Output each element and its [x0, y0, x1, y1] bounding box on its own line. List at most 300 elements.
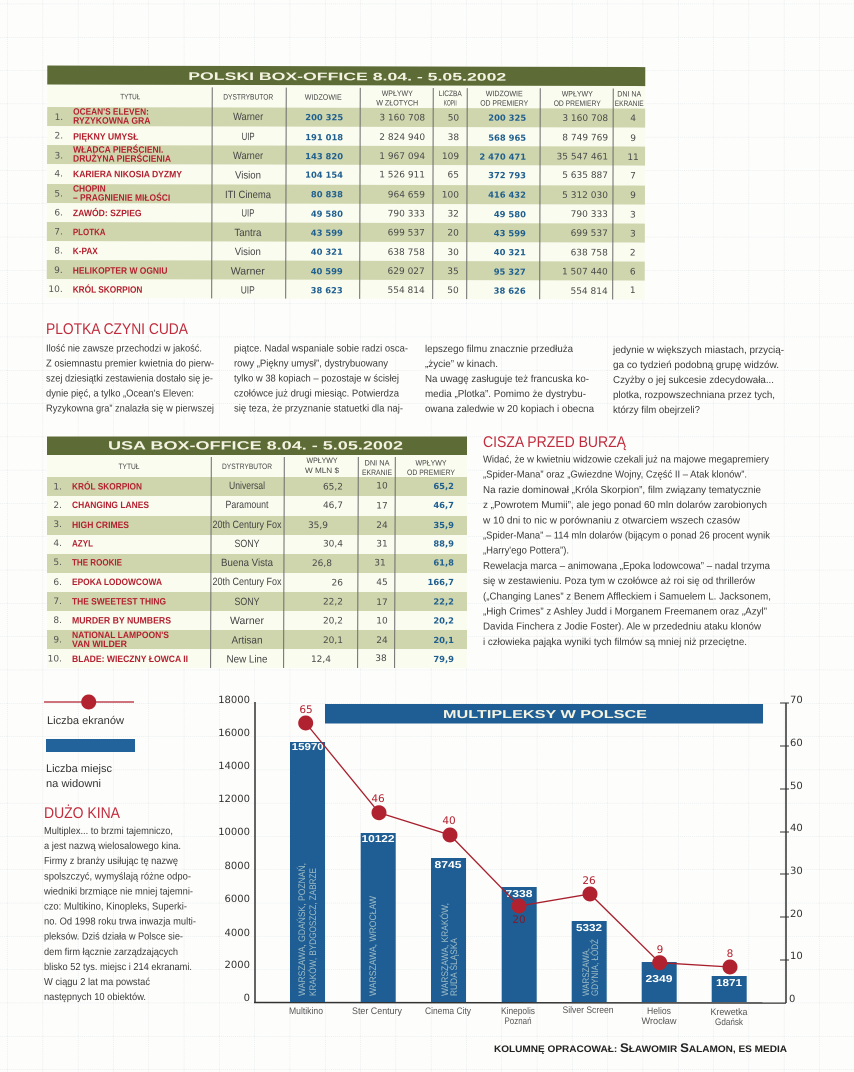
- row 3: Władca Pierścieni: 1 967 094: [379, 152, 425, 162]
- line series: number of screens: 26: [582, 875, 596, 887]
- row 6: Epoka lodowcowa: 6.: [53, 578, 62, 588]
- row 6: Epoka lodowcowa: 26: [332, 578, 343, 588]
- row 1: Ocean's Eleven: 3 160 708: [379, 113, 425, 123]
- row 6: Zawód: szpieg: 49 580: [311, 209, 343, 219]
- body paragraph lines: w 10 dni to nic w porównaniu z otwarciem wszech czasów: [482, 515, 741, 526]
- row 7: The Sweetest Thing: 22,2: [323, 598, 343, 608]
- row 3: High Crimes: 24: [376, 521, 388, 531]
- bar: Kinepolis Poznań 7338: 7338: [506, 889, 533, 900]
- row 6: Zawód: szpieg: 3: [630, 211, 636, 221]
- bar: Multikino 15970: WARSZAWA, GDAŃSK, POZNAŃ,: [296, 863, 308, 996]
- row 8: K-Pax: 40 321: [494, 247, 526, 257]
- row 8: K-Pax: 2: [630, 249, 636, 259]
- column headers: WPŁYWY: [562, 89, 593, 98]
- chart title band: [325, 704, 763, 724]
- column headers: TYTUŁ: [118, 462, 140, 471]
- row 1: Ocean's Eleven: 200 325: [488, 113, 526, 123]
- row 9: Helikopter w ogniu: 1 507 440: [562, 267, 608, 277]
- bar: Krewetka Gdańsk 1871: [712, 976, 747, 1002]
- column headers: WPŁYWY: [416, 458, 447, 468]
- column 3: owana zaledwie w 20 kopiach i obecna: [425, 404, 594, 415]
- row 7: Plotka: 43 599: [494, 228, 526, 238]
- row 10: Król Skorpion: 1: [630, 286, 636, 296]
- row 7: Plotka: Tantra: [234, 227, 262, 239]
- line series: number of screens: 40: [442, 815, 456, 827]
- row 3: High Crimes: HIGH CRIMES: [72, 520, 129, 530]
- column headers: DYSTRYBUTOR: [222, 462, 272, 471]
- row 8: Murder by Numbers: 20,2: [323, 616, 343, 626]
- row 3: Władca Pierścieni: DRUŻYNA PIERŚCIENIA: [73, 153, 171, 164]
- column 4: ga co tydzień podobną grupę widzów.: [613, 360, 779, 371]
- bar: Multikino 15970: [290, 742, 325, 1002]
- category labels: Wrocław: [642, 1016, 677, 1027]
- legend: screens line marker: Liczba ekranów: [47, 715, 124, 727]
- left axis: seats: 6000: [225, 894, 250, 905]
- row 6: Epoka lodowcowa: 20th Century Fox: [212, 576, 282, 588]
- column 2: piątce. Nadal wspaniale sobie radzi osca-: [234, 344, 408, 354]
- row 9: National Lampoon's Van Wilder: 9.: [53, 636, 62, 646]
- legend: seats bar swatch: na widowni: [46, 778, 101, 790]
- row 6: Zawód: szpieg: 49 580: [494, 209, 526, 219]
- row 10: Blade: Wieczny łowca II: 10.: [48, 654, 62, 664]
- row 10: Blade: Wieczny łowca II: 12,4: [311, 655, 331, 665]
- column headers: LICZBA: [439, 89, 462, 98]
- row 6: Zawód: szpieg: UIP: [241, 208, 254, 220]
- chart title band: MULTIPLEKSY W POLSCE: [443, 709, 647, 721]
- table title band: [47, 66, 645, 86]
- column headers: DYSTRYBUTOR: [223, 92, 274, 102]
- row 8: Murder by Numbers: [53, 615, 454, 627]
- row 2: Piękny umysł: PIĘKNY UMYSŁ: [73, 132, 139, 142]
- row 8: Murder by Numbers: Warner: [230, 615, 264, 627]
- body paragraph lines: z „Powrotem Mumii”, ale jego ponad 60 mln dolarów zarobionych: [483, 500, 767, 511]
- row 2: Piękny umysł: 9: [630, 134, 636, 144]
- row 10: Król Skorpion: 38 626: [494, 286, 526, 296]
- row 5: Chopin: 100: [442, 191, 459, 201]
- column 3: media „Plotka”. Pomimo że dystrybu-: [425, 389, 586, 400]
- column headers: OD PREMIERY: [554, 99, 601, 108]
- row 5: The Rookie: Buena Vista: [221, 557, 273, 569]
- row 6: Zawód: szpieg: [54, 207, 636, 221]
- right axis: screens: 30: [790, 866, 803, 877]
- column headers: EKRANIE: [362, 468, 392, 477]
- row 3: Władca Pierścieni: [47, 144, 645, 166]
- column headers: WIDZOWIE: [305, 93, 342, 102]
- row 5: Chopin: ITI Cinema: [225, 189, 271, 201]
- row 9: National Lampoon's Van Wilder: 20,1: [323, 636, 343, 646]
- body paragraph lines: [482, 454, 771, 648]
- row 4: Kariera Nikosia Dyzmy: [54, 169, 636, 183]
- bar: Kinepolis Poznań 7338: [502, 887, 537, 1002]
- row 8: K-Pax: K-PAX: [73, 246, 99, 256]
- row 2: Piękny umysł: 38: [448, 133, 459, 143]
- column 1: Z osiemnastu premier kwietnia do pierw-: [46, 358, 214, 370]
- row 2: Changing Lanes: 17: [376, 502, 388, 512]
- row 7: Plotka: 699 537: [388, 228, 425, 238]
- body paragraph lines: się w zestawieniu. Poza tym w czołówce aż roi się od thrillerów: [483, 576, 756, 587]
- row 4: Kariera Nikosia Dyzmy: 65: [448, 171, 459, 181]
- bar: Cinema City 8745: RUDA ŚLĄSKA: [448, 937, 460, 996]
- bar: Silver Screen 5332: GDYNIA, ŁÓDŹ: [589, 939, 601, 996]
- column 1: szej dziesiątki zestawienia dostało się je-: [46, 374, 213, 384]
- row 5: The Rookie: 31: [374, 558, 386, 568]
- body paragraph lines: dem firm łącznie zarządzających: [44, 947, 178, 958]
- column 4: plotka, rozpowszechniana przez tych,: [613, 390, 775, 401]
- row 1: Ocean's Eleven: [47, 107, 645, 128]
- row 9: Helikopter w ogniu: 35: [447, 267, 459, 277]
- right axis: screens: 0: [789, 994, 795, 1005]
- bar: Multikino 15970: 15970: [292, 742, 324, 753]
- row 7: The Sweetest Thing: [47, 592, 467, 611]
- row 8: K-Pax: 638 758: [388, 248, 425, 258]
- row 7: The Sweetest Thing: THE SWEETEST THING: [72, 596, 166, 606]
- row 3: High Crimes: [47, 516, 467, 535]
- row 10: Król Skorpion: [48, 284, 636, 298]
- row 10: Król Skorpion: 38 623: [311, 285, 343, 295]
- column headers: KOPII: [444, 99, 457, 108]
- row 4: Kariera Nikosia Dyzmy: 1 526 911: [379, 170, 425, 180]
- bar: Helios Wrocław 2349: 2349: [646, 974, 673, 985]
- row 6: Zawód: szpieg: 790 333: [388, 209, 425, 219]
- body paragraph lines: Firmy z branży usiłując tę nazwę: [44, 856, 178, 867]
- left axis: seats: 2000: [225, 960, 250, 971]
- body paragraph lines: „High Crimes” z Ashley Judd i Morganem Freemanem oraz „Azyl”: [483, 606, 767, 618]
- panel: Polish box-office table: [47, 66, 645, 300]
- row 2: Piękny umysł: [55, 131, 636, 144]
- bar: Cinema City 8745: [431, 858, 466, 1002]
- left axis: seats: 16000: [218, 728, 250, 739]
- row 8: K-Pax: 8.: [54, 247, 63, 257]
- row 2: Changing Lanes: [53, 499, 454, 512]
- row 7: Plotka: 699 537: [571, 229, 608, 239]
- row 10: Blade: Wieczny łowca II: BLADE: WIECZNY ŁOWCA II: [72, 654, 188, 664]
- row 1: Król Skorpion: [47, 477, 467, 496]
- row 4: Azyl: AZYL: [72, 538, 93, 548]
- row 4: Azyl: 31: [376, 540, 388, 550]
- bar: Cinema City 8745: 8745: [434, 860, 462, 871]
- column 1: Ilość nie zawsze przechodzi w jakość.: [46, 344, 202, 354]
- bar: Ster Century 10122: WARSZAWA, WROCŁAW: [368, 896, 379, 996]
- row 1: Król Skorpion: 10: [376, 482, 388, 492]
- right axis: screens: 50: [790, 781, 803, 792]
- body paragraph lines: blisko 52 tys. miejsc i 214 ekranami.: [44, 962, 192, 973]
- row 5: The Rookie: 5.: [53, 558, 62, 568]
- body paragraph lines: wiedniki brzmiące nie mniej tajemni-: [43, 886, 193, 897]
- bar: Cinema City 8745: WARSZAWA, KRAKÓW,: [439, 903, 451, 996]
- column headers: OD PREMIERY: [480, 99, 529, 108]
- row 3: Władca Pierścieni: WŁADCA PIERŚCIENI.: [73, 144, 163, 155]
- body paragraph lines: no. Od 1998 roku trwa inwazja multi-: [44, 917, 196, 928]
- row 9: National Lampoon's Van Wilder: Artisan: [232, 634, 263, 646]
- category labels: Poznań: [504, 1016, 532, 1027]
- column 4: Czyżby o jej sukcesie zdecydowała...: [613, 375, 774, 386]
- row 1: Król Skorpion: 65,2: [433, 481, 454, 491]
- column headers: W MLN $: [305, 466, 340, 475]
- row 9: Helikopter w ogniu: 95 327: [494, 267, 526, 277]
- line series: number of screens: 8: [727, 948, 733, 960]
- table title band: [47, 436, 467, 455]
- left axis: seats: 14000: [218, 761, 250, 772]
- row 10: Blade: Wieczny łowca II: New Line: [226, 654, 268, 666]
- category labels: [289, 1005, 748, 1028]
- row 2: Piękny umysł: 2 824 940: [379, 133, 425, 143]
- bar: Krewetka Gdańsk 1871: 1871: [716, 978, 743, 989]
- row 5: The Rookie: 61,8: [433, 558, 454, 568]
- right axis: screens: 20: [790, 909, 803, 920]
- row 5: Chopin: CHOPIN: [73, 184, 106, 194]
- row 3: Władca Pierścieni: 11: [627, 153, 639, 163]
- row 10: Król Skorpion: UIP: [241, 285, 255, 297]
- body paragraph lines: [43, 826, 196, 1003]
- column headers: W ZŁOTYCH: [376, 98, 418, 107]
- row 4: Kariera Nikosia Dyzmy: 5 635 887: [562, 171, 608, 181]
- row 3: Władca Pierścieni: 3.: [54, 152, 63, 162]
- row 9: Helikopter w ogniu: 629 027: [388, 267, 425, 277]
- row 2: Piękny umysł: 568 965: [488, 133, 526, 143]
- row 4: Azyl: 4.: [53, 539, 62, 549]
- row 10: Blade: Wieczny łowca II: 38: [375, 654, 387, 664]
- row 5: Chopin: 80 838: [311, 189, 343, 199]
- left axis: seats: 4000: [225, 928, 250, 939]
- column 2: [234, 344, 408, 414]
- text block: Dużo kina: [43, 804, 196, 1003]
- bar: Helios Wrocław 2349: [642, 962, 677, 1002]
- row 1: Ocean's Eleven: Warner: [233, 111, 264, 123]
- bar: Silver Screen 5332: WARSZAWA,: [581, 948, 592, 996]
- body paragraph lines: i człowieka pająka wyniki tych filmów są mniej niż przeciętne.: [483, 637, 747, 648]
- row 7: Plotka: PLOTKA: [73, 227, 106, 237]
- text block: Cisza przed burzą: [482, 434, 771, 648]
- right axis: screens: 10: [790, 951, 803, 962]
- row 1: Ocean's Eleven: OCEAN'S ELEVEN:: [73, 107, 149, 117]
- row 6: Epoka lodowcowa: 45: [376, 578, 388, 588]
- row 7: Plotka: 7.: [54, 228, 63, 238]
- row 7: The Sweetest Thing: SONY: [234, 596, 260, 608]
- row 4: Azyl: 88,9: [433, 538, 454, 548]
- bar: Silver Screen 5332: [572, 921, 607, 1002]
- row 5: The Rookie: [47, 554, 467, 573]
- table title band: USA BOX-OFFICE 8.04. - 5.05.2002: [108, 438, 403, 452]
- row 8: K-Pax: [54, 246, 636, 259]
- row 6: Zawód: szpieg: ZAWÓD: SZPIEG: [73, 207, 142, 218]
- row 8: Murder by Numbers: 10: [376, 616, 388, 626]
- line series: number of screens: [298, 704, 738, 974]
- right axis: screens: 40: [790, 823, 803, 834]
- row 1: Ocean's Eleven: RYZYKOWNA GRA: [73, 116, 151, 126]
- body paragraph lines: „Harry'ego Pottera”).: [483, 546, 569, 557]
- right axis: screens: 60: [790, 738, 803, 749]
- bar: Ster Century 10122: [361, 833, 396, 1002]
- row 2: Piękny umysł: 191 018: [305, 132, 343, 142]
- row 10: Blade: Wieczny łowca II: [48, 654, 454, 666]
- column headers: [118, 456, 456, 477]
- column 1: [46, 344, 214, 414]
- row 7: Plotka: 3: [630, 230, 636, 240]
- legend: seats bar swatch: Liczba miejsc: [46, 763, 112, 775]
- row 2: Changing Lanes: 46,7: [433, 500, 454, 510]
- row 9: Helikopter w ogniu: HELIKOPTER W OGNIU: [73, 266, 168, 276]
- column 1: Ryzykowna gra” znalazła się w pierwszej: [46, 404, 214, 414]
- body paragraph lines: następnych 10 obiektów.: [44, 992, 146, 1003]
- row 3: High Crimes: 35,9: [308, 521, 328, 531]
- right axis: screens: [780, 695, 803, 1005]
- row 9: Helikopter w ogniu: [47, 260, 645, 281]
- row 8: K-Pax: 40 321: [311, 247, 343, 257]
- row 7: The Sweetest Thing: 7.: [53, 597, 62, 607]
- row 7: Plotka: [47, 222, 645, 243]
- row 2: Changing Lanes: CHANGING LANES: [72, 500, 149, 510]
- bar: Ster Century 10122: 10122: [362, 834, 395, 845]
- left axis: seats: 0: [244, 993, 250, 1004]
- body paragraph lines: a jest nazwą wielosalowego kina.: [44, 841, 181, 852]
- row 2: Piękny umysł: UIP: [242, 131, 255, 143]
- body paragraph lines: spolszczyć, wymyślają różne odpo-: [44, 871, 191, 882]
- row 9: National Lampoon's Van Wilder: [47, 630, 467, 649]
- row 7: The Sweetest Thing: 22,2: [433, 596, 454, 606]
- row 1: Ocean's Eleven: 4: [630, 114, 636, 124]
- line series: number of screens: 65: [299, 704, 313, 716]
- category labels: Gdańsk: [715, 1017, 743, 1028]
- left axis: seats: 10000: [218, 827, 250, 838]
- column headers: [120, 88, 644, 108]
- row 3: Władca Pierścieni: 109: [442, 152, 459, 162]
- column 2: czołówce już drugi miesiąc. Potwierdza: [234, 388, 399, 400]
- row 1: Ocean's Eleven: 200 325: [305, 112, 343, 122]
- column headers: DNI NA: [617, 89, 642, 99]
- row 2: Piękny umysł: 2.: [55, 132, 63, 142]
- row 7: Plotka: 43 599: [311, 228, 343, 238]
- category labels: Ster Century: [352, 1006, 402, 1017]
- row 9: Helikopter w ogniu: 40 599: [311, 266, 343, 276]
- column 3: Na uwagę zasługuje też francuska ko-: [425, 374, 589, 385]
- column 1: dynie pięć, a tylko „Ocean's Eleven:: [46, 388, 194, 400]
- row 3: Władca Pierścieni: 35 547 461: [557, 152, 608, 162]
- legend: [44, 694, 135, 790]
- heading: Dużo kina: DUŻO KINA: [44, 804, 121, 822]
- column 2: rowy „Piękny umysł”, dystrybuowany: [234, 358, 388, 370]
- body paragraph lines: Widać, że w kwietniu widzowie czekali już na majowe megapremiery: [483, 454, 769, 466]
- row 9: National Lampoon's Van Wilder: NATIONAL LAMPOON'S: [72, 630, 169, 640]
- row 5: The Rookie: 26,8: [312, 559, 332, 569]
- left axis: seats: 8000: [225, 861, 250, 872]
- category labels: Multikino: [289, 1006, 323, 1017]
- category labels: Helios: [647, 1006, 671, 1017]
- row 3: Władca Pierścieni: 143 820: [305, 151, 343, 161]
- row 10: Blade: Wieczny łowca II: 79,9: [433, 654, 454, 664]
- column 3: „życie” w kinach.: [425, 359, 498, 370]
- row 4: Kariera Nikosia Dyzmy: 104 154: [305, 170, 343, 180]
- line series: number of screens: 46: [371, 793, 385, 805]
- row 4: Kariera Nikosia Dyzmy: 372 793: [488, 170, 526, 180]
- row 2: Changing Lanes: 2.: [53, 501, 62, 511]
- panel: USA box-office table: [47, 436, 467, 668]
- row 1: Ocean's Eleven: 50: [448, 114, 459, 124]
- row 4: Azyl: 30,4: [323, 540, 343, 550]
- left axis: seats: [218, 695, 255, 1004]
- column headers: WIDZOWIE: [486, 89, 523, 98]
- column 2: się teza, że przyznanie statuetki dla naj-: [234, 404, 403, 414]
- column 4: którzy film obejrzeli?: [613, 405, 700, 416]
- table title band: POLSKI BOX-OFFICE 8.04. - 5.05.2002: [188, 71, 506, 84]
- row 9: Helikopter w ogniu: 6: [630, 268, 636, 278]
- body paragraph lines: Davida Finchera z Jodie Foster). Ale w przededniu ataku klonów: [483, 622, 762, 633]
- row 7: The Sweetest Thing: 17: [376, 598, 388, 608]
- body paragraph lines: „Spider-Mana” oraz „Gwiezdne Wojny, Część II – Atak klonów”.: [483, 470, 747, 481]
- text block: Plotka czyni cuda: [46, 321, 784, 416]
- column 3: [425, 344, 594, 415]
- category labels: Cinema City: [425, 1006, 471, 1017]
- column headers: TYTUŁ: [120, 92, 141, 101]
- footer credit: KOLUMNĘ OPRACOWAŁ: SŁAWOMIR SALAMON, ES MEDIA: [494, 1041, 787, 1055]
- row 6: Zawód: szpieg: 790 333: [571, 210, 608, 220]
- row 9: Helikopter w ogniu: Warner: [231, 265, 265, 278]
- body paragraph lines: Rewelacja marca – animowana „Epoka lodowcowa” – nadal trzyma: [483, 561, 770, 572]
- category labels: Krewetka: [710, 1007, 748, 1018]
- row 5: Chopin: – PRAGNIENIE MIŁOŚCI: [73, 192, 170, 203]
- line series: number of screens: 20: [512, 914, 526, 926]
- row 5: The Rookie: THE ROOKIE: [72, 558, 122, 568]
- row 3: High Crimes: 3.: [53, 520, 62, 530]
- row 10: Król Skorpion: 10.: [48, 285, 63, 295]
- row 8: Murder by Numbers: 20,2: [433, 616, 454, 626]
- row 1: Król Skorpion: Universal: [229, 480, 265, 492]
- row 8: Murder by Numbers: 8.: [53, 616, 62, 626]
- body paragraph lines: „Spider-Mana” – 114 mln dolarów (bijącym o ponad 26 procent wynik: [483, 530, 771, 542]
- row 4: Kariera Nikosia Dyzmy: 4.: [54, 170, 63, 180]
- heading: Plotka czyni cuda: PLOTKA CZYNI CUDA: [46, 321, 189, 338]
- row 2: Changing Lanes: 46,7: [323, 501, 343, 511]
- line series: number of screens: 9: [657, 944, 663, 956]
- row 8: K-Pax: Vision: [235, 246, 261, 258]
- column headers: EKRANIE: [615, 99, 644, 108]
- row 10: Król Skorpion: 554 814: [570, 287, 608, 297]
- row 4: Kariera Nikosia Dyzmy: Vision: [235, 169, 261, 182]
- body paragraph lines: pleksów. Dziś działa w Polsce sie-: [44, 932, 183, 943]
- row 10: Król Skorpion: 554 814: [387, 286, 425, 296]
- body paragraph lines: Multiplex... to brzmi tajemniczo,: [44, 826, 173, 837]
- row 6: Epoka lodowcowa: EPOKA LODOWCOWA: [72, 577, 162, 587]
- row 2: Changing Lanes: Paramount: [226, 499, 269, 511]
- left axis: seats: 18000: [218, 695, 250, 706]
- row 4: Kariera Nikosia Dyzmy: 7: [630, 172, 636, 182]
- row 1: Król Skorpion: 1.: [53, 482, 62, 492]
- row 1: Król Skorpion: KRÓL SKORPION: [72, 480, 142, 492]
- body paragraph lines: W ciągu 2 lat ma powstać: [44, 977, 150, 988]
- column headers: OD PREMIERY: [407, 468, 456, 477]
- row 4: Azyl: [53, 538, 454, 550]
- category labels: Silver Screen: [562, 1005, 614, 1016]
- row 6: Epoka lodowcowa: 166,7: [428, 577, 454, 587]
- row 10: Król Skorpion: KRÓL SKORPION: [73, 284, 143, 295]
- column 3: lepszego filmu znacznie przedłuża: [425, 344, 573, 355]
- row 5: Chopin: 5.: [54, 190, 63, 200]
- row 2: Piękny umysł: 8 749 769: [562, 133, 608, 143]
- row 5: Chopin: 5 312 030: [562, 191, 608, 201]
- row 3: High Crimes: 20th Century Fox: [212, 519, 282, 531]
- column 4: jedynie w większych miastach, przycią-: [612, 345, 784, 356]
- row 3: Władca Pierścieni: Warner: [233, 150, 264, 162]
- row 10: Król Skorpion: 50: [447, 286, 459, 296]
- column 2: tylko w 38 kopiach – pozostaje w ścisłej: [234, 374, 399, 384]
- row 9: National Lampoon's Van Wilder: 24: [376, 636, 388, 646]
- row 8: K-Pax: 30: [447, 248, 459, 258]
- row 1: Ocean's Eleven: 3 160 708: [562, 114, 608, 124]
- row 3: Władca Pierścieni: 2 470 471: [479, 152, 526, 162]
- row 7: Plotka: 20: [447, 229, 459, 239]
- row 5: Chopin: 416 432: [488, 190, 526, 200]
- row 1: Król Skorpion: 65,2: [323, 482, 343, 492]
- row 9: National Lampoon's Van Wilder: 20,1: [433, 635, 454, 645]
